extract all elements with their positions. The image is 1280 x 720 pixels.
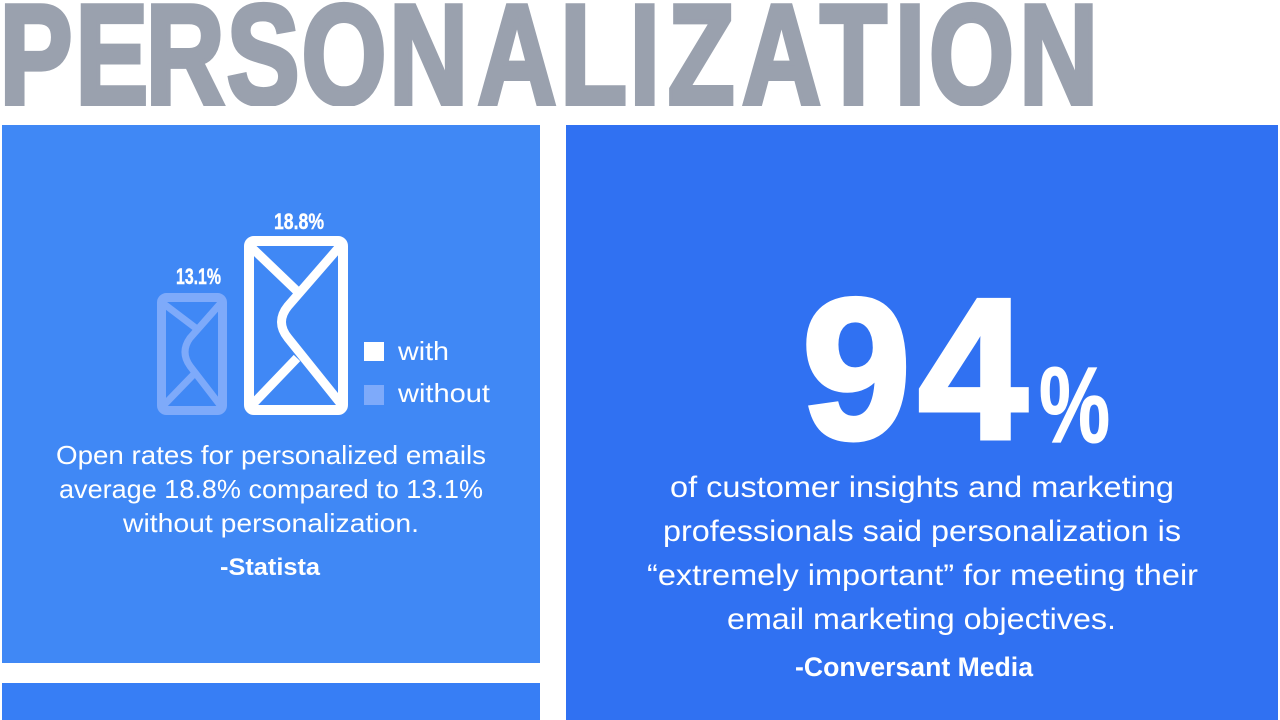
text: open rates description: average 18.8% compared to 13.1% bbox=[59, 474, 483, 504]
legend: with bbox=[364, 336, 449, 366]
icon: small envelope without personalization bbox=[162, 298, 222, 410]
source: Statista: -Statista bbox=[220, 554, 321, 581]
text: statistic description: of customer insights and marketing bbox=[670, 471, 1174, 504]
legend: without bbox=[364, 378, 491, 408]
text: statistic description: email marketing objectives. bbox=[727, 603, 1116, 636]
big number 94: 94 bbox=[802, 257, 1027, 480]
icon: large envelope with personalization bbox=[249, 241, 343, 410]
legend: with: with bbox=[397, 336, 449, 366]
panel: next section, cropped bbox=[2, 683, 540, 720]
label: 13.1%: 13.1% bbox=[176, 264, 221, 289]
text: open rates description bbox=[56, 440, 486, 538]
text: statistic description: professionals said personalization is bbox=[663, 515, 1181, 548]
percent sign: % bbox=[1039, 345, 1110, 466]
text: open rates description: without personalization. bbox=[122, 508, 419, 538]
text: statistic description bbox=[647, 471, 1198, 636]
source: Conversant Media: -Conversant Media bbox=[795, 652, 1034, 682]
text: statistic description: “extremely important” for meeting their bbox=[647, 559, 1198, 592]
label: 18.8%: 18.8% bbox=[274, 209, 324, 234]
legend: without: without bbox=[397, 378, 491, 408]
text: open rates description: Open rates for personalized emails bbox=[56, 440, 486, 470]
panel: 94 percent statistic bbox=[566, 125, 1278, 720]
panel: email open rates bbox=[2, 125, 540, 663]
